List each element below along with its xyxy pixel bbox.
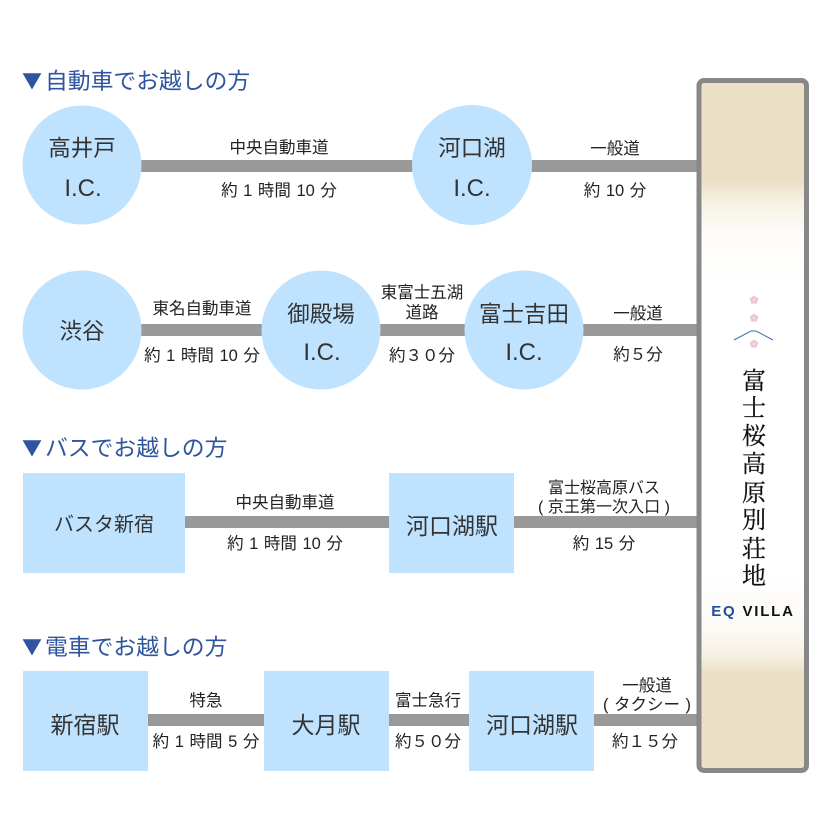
node: Fujiyoshida IC: I.C. — [505, 339, 543, 366]
icon: cherry blossoms and mountain — [734, 296, 773, 348]
vertical title: 地 — [742, 556, 766, 591]
label: general road, 5 min: 約５分 — [613, 345, 663, 364]
node: Kawaguchiko Station — [389, 473, 514, 573]
label: Higashi-Fuji Goko road, 30 min: 道路 — [406, 303, 439, 322]
label: Tomei Expressway, 1h10m: 約 1 時間 10 分 — [144, 346, 260, 365]
vertical title: 別 — [742, 500, 766, 535]
label: Fujikyuko, 50 min: 富士急行 — [395, 691, 461, 710]
node: Fujiyoshida IC: 富士吉田 — [479, 302, 569, 327]
label: Fujizakura Kogen bus, 15 min: 富士桜高原バス — [548, 479, 660, 497]
label: general road taxi, 15 min: ( タクシー ) — [603, 695, 691, 714]
label: Fujizakura Kogen bus, 15 min: ( 京王第一次入口 ) — [538, 498, 670, 516]
vertical title — [742, 361, 766, 591]
node: Takaido IC: I.C. — [64, 175, 102, 202]
destination panel: EQ Villa — [699, 80, 806, 770]
vertical title: 原 — [742, 473, 766, 508]
node: Gotemba IC — [262, 270, 380, 390]
node: Shibuya: 渋谷 — [59, 319, 105, 344]
node: Takaido IC — [22, 106, 142, 224]
label: limited express, 1h5m: 約 1 時間 5 分 — [153, 732, 260, 751]
label: Chuo Expressway, 1h10m: 約 1 時間 10 分 — [227, 534, 343, 553]
node: Shibuya — [22, 270, 142, 390]
label: Chuo Expressway, 1h10m — [221, 138, 337, 200]
vertical title: 桜 — [742, 416, 766, 451]
label: limited express, 1h5m — [153, 691, 260, 751]
heading: by car: ▼ — [22, 65, 42, 94]
node: Shinjuku Station — [23, 671, 148, 771]
label: Fujizakura Kogen bus, 15 min: 約 15 分 — [573, 534, 636, 553]
label: Chuo Expressway, 1h10m — [227, 493, 343, 553]
label: general road, 10 min — [584, 139, 647, 200]
label: Tomei Expressway, 1h10m: 東名自動車道 — [152, 299, 252, 318]
vertical title: 富 — [742, 361, 766, 396]
node: Kawaguchiko IC — [412, 105, 532, 225]
label: Fujizakura Kogen bus, 15 min — [538, 479, 670, 553]
vertical title: 荘 — [742, 529, 766, 564]
vertical title: 士 — [742, 388, 766, 423]
heading: by bus: ▼ — [22, 432, 42, 461]
heading: by bus: バスでお越しの方 — [45, 435, 227, 461]
logo: EQ VILLA: EQ VILLA — [711, 603, 795, 620]
label: general road taxi, 15 min: 約１５分 — [612, 732, 678, 751]
label: Fujikyuko, 50 min — [395, 691, 462, 751]
node: Kawaguchiko Station: 河口湖駅 — [406, 513, 498, 539]
label: limited express, 1h5m: 特急 — [190, 691, 222, 710]
node: Kawaguchiko IC: 河口湖 — [438, 136, 506, 161]
node: Gotemba IC: I.C. — [303, 339, 341, 366]
node: Busta Shinjuku — [23, 473, 185, 573]
label: Fujikyuko, 50 min: 約５０分 — [395, 732, 462, 751]
label: Chuo Expressway, 1h10m: 約 1 時間 10 分 — [221, 181, 337, 200]
node: Kawaguchiko Station — [469, 671, 594, 771]
label: general road taxi, 15 min — [603, 676, 691, 751]
label: general road, 10 min: 一般道 — [590, 139, 640, 158]
vertical title: 高 — [742, 444, 766, 479]
node: Busta Shinjuku: バスタ新宿 — [54, 513, 154, 536]
heading: by train: 電車でお越しの方 — [45, 634, 227, 660]
route lines: all connectors — [140, 160, 698, 726]
heading: by train: ▼ — [22, 631, 42, 660]
label: Chuo Expressway, 1h10m: 中央自動車道 — [230, 138, 328, 157]
label: general road, 10 min: 約 10 分 — [584, 181, 647, 200]
node: Otsuki Station — [264, 671, 389, 771]
heading: by car: 自動車でお越しの方 — [45, 68, 250, 94]
node: Kawaguchiko Station: 河口湖駅 — [486, 712, 578, 738]
label: Chuo Expressway, 1h10m: 中央自動車道 — [236, 493, 334, 512]
label: Higashi-Fuji Goko road, 30 min: 約３０分 — [389, 346, 456, 365]
label: general road, 5 min — [613, 304, 663, 364]
label: Higashi-Fuji Goko road, 30 min — [381, 283, 463, 365]
label: general road taxi, 15 min: 一般道 — [622, 676, 672, 695]
label: Tomei Expressway, 1h10m — [144, 299, 260, 365]
node: Shinjuku Station: 新宿駅 — [50, 712, 120, 738]
node: Fujiyoshida IC — [464, 270, 584, 390]
node: Otsuki Station: 大月駅 — [292, 712, 360, 738]
node: Takaido IC: 高井戸 — [48, 136, 116, 161]
label: general road, 5 min: 一般道 — [613, 304, 663, 323]
node: Gotemba IC: 御殿場 — [287, 302, 355, 327]
node: Kawaguchiko IC: I.C. — [453, 175, 491, 202]
label: Higashi-Fuji Goko road, 30 min: 東富士五湖 — [381, 283, 463, 302]
